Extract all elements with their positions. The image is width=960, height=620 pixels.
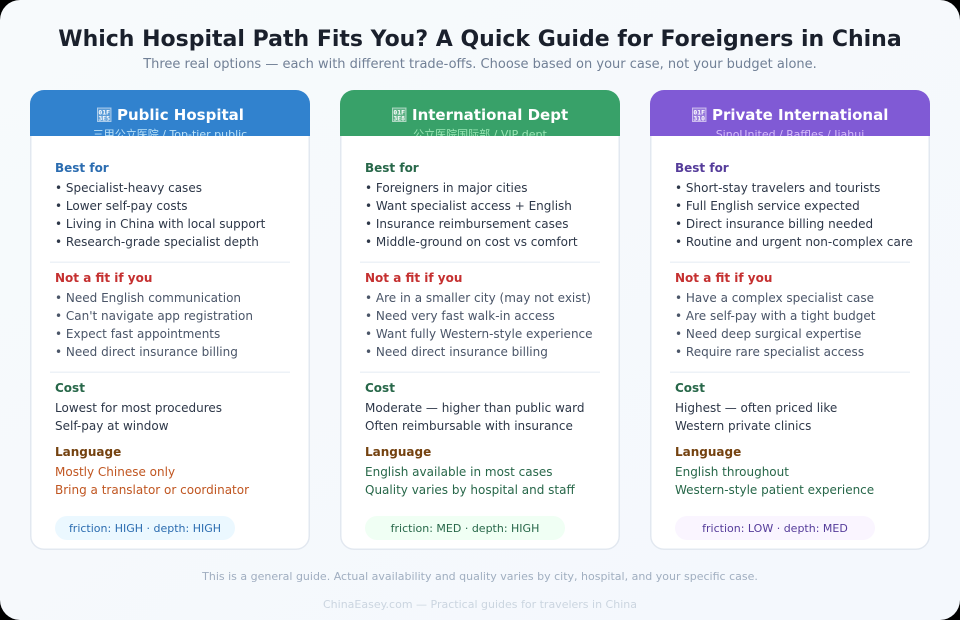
- section: not a fit: • Need very fast walk-in access: [365, 309, 555, 323]
- section: best for: • Insurance reimbursement cases: [365, 217, 568, 231]
- section: not a fit: • Need direct insurance billing: [365, 345, 548, 359]
- section: not a fit: Not a fit if you: [55, 271, 152, 285]
- section: not a fit: Not a fit if you: [675, 271, 772, 285]
- icon: missing-glyph box U+1F310: [692, 108, 706, 123]
- section: not a fit: • Have a complex specialist case: [675, 291, 874, 305]
- section: cost: Often reimbursable with insurance: [365, 419, 573, 433]
- section: not a fit: • Expect fast appointments: [55, 327, 220, 341]
- section: cost: Highest — often priced like: [675, 401, 837, 415]
- section: best for: • Research-grade specialist depth: [55, 235, 259, 249]
- card header: public hospital: [30, 90, 310, 141]
- section: not a fit: Not a fit if you: [365, 271, 462, 285]
- section: language: [55, 445, 249, 497]
- section: best for: • Middle-ground on cost vs comfort: [365, 235, 578, 249]
- section: language: Bring a translator or coordinator: [55, 483, 249, 497]
- card header: international dept: 公立医院国际部 / VIP dept: [413, 127, 548, 141]
- badge: friction and depth: friction: LOW · depth: MED: [702, 522, 848, 535]
- title: Which Hospital Path Fits You? A Quick Guide for Foreigners in China: [58, 27, 902, 52]
- section: best for: • Specialist-heavy cases: [55, 181, 202, 195]
- section: language: [365, 445, 575, 497]
- icon: missing-glyph box U+1F3E8: 3E8: [393, 115, 405, 123]
- section: not a fit: • Are in a smaller city (may not exist): [365, 291, 591, 305]
- card header: public hospital: 三甲公立医院 / Top-tier public: [93, 127, 247, 141]
- section: not a fit: • Are self-pay with a tight budget: [675, 309, 876, 323]
- section: cost: Cost: [675, 381, 705, 395]
- section: best for: • Short-stay travelers and tourists: [675, 181, 880, 195]
- section: language: English available in most cases: [365, 465, 553, 479]
- section: best for: • Routine and urgent non-complex care: [675, 235, 913, 249]
- section: not a fit: • Require rare specialist access: [675, 345, 864, 359]
- icon: missing-glyph box U+1F3E5: [98, 108, 111, 123]
- card body: private international: [650, 136, 930, 550]
- subtitle: Three real options — each with different trade-offs. Choose based on your case, not your budget alone.: [142, 57, 817, 72]
- section: not a fit: • Need deep surgical expertise: [675, 327, 861, 341]
- section: best for: • Want specialist access + English: [365, 199, 572, 213]
- section: language: Quality varies by hospital and staff: [365, 483, 575, 497]
- section: cost: [365, 381, 585, 433]
- badge: friction and depth: friction: MED · depth: HIGH: [391, 522, 539, 535]
- section: best for: • Direct insurance billing needed: [675, 217, 873, 231]
- icon: missing-glyph box U+1F310: 01F: [693, 108, 705, 116]
- section: language: Mostly Chinese only: [55, 465, 175, 479]
- section: language: Western-style patient experience: [675, 483, 874, 497]
- section: not a fit: • Can't navigate app registration: [55, 309, 253, 323]
- card body: public hospital: [30, 136, 310, 550]
- card header: private international: Private International: [712, 106, 888, 124]
- section: cost: Cost: [365, 381, 395, 395]
- section: cost: [675, 381, 837, 433]
- section: language: Language: [365, 445, 431, 459]
- section: not a fit: • Want fully Western-style experience: [365, 327, 593, 341]
- panel: international dept: [340, 90, 620, 550]
- section: cost: Cost: [55, 381, 85, 395]
- section: not a fit: [675, 271, 876, 359]
- section: cost: Moderate — higher than public ward: [365, 401, 585, 415]
- section: language: English throughout: [675, 465, 789, 479]
- card header: international dept: International Dept: [412, 106, 568, 124]
- card header: international dept: [340, 90, 620, 141]
- section: not a fit: • Need English communication: [55, 291, 241, 305]
- panel: public hospital: [30, 90, 310, 550]
- card body: international dept: [340, 136, 620, 550]
- icon: missing-glyph box U+1F3E8: [392, 108, 406, 123]
- icon: missing-glyph box U+1F310: 310: [693, 115, 705, 123]
- section: cost: Lowest for most procedures: [55, 401, 222, 415]
- section: best for: [675, 161, 913, 249]
- section: language: Language: [675, 445, 741, 459]
- section: best for: • Living in China with local support: [55, 217, 266, 231]
- section: language: Language: [55, 445, 121, 459]
- section: best for: Best for: [55, 161, 109, 175]
- section: not a fit: • Need direct insurance billing: [55, 345, 238, 359]
- icon: missing-glyph box U+1F3E5: 01F: [98, 108, 110, 116]
- section: best for: Best for: [675, 161, 729, 175]
- disclaimer: This is a general guide. Actual availability and quality varies by city, hospital, and your specific case.: [201, 570, 758, 583]
- panel: private international: [650, 90, 930, 550]
- section: cost: Western private clinics: [675, 419, 811, 433]
- card header: private international: SinoUnited / Raffles / Jiahui: [716, 128, 864, 141]
- section: not a fit: [55, 271, 253, 359]
- footer credit: ChinaEasey.com — Practical guides for travelers in China: [323, 598, 637, 611]
- section: best for: Best for: [365, 161, 419, 175]
- section: not a fit: [365, 271, 593, 359]
- badge: friction and depth: [675, 516, 875, 540]
- section: best for: • Lower self-pay costs: [55, 199, 188, 213]
- section: cost: Self-pay at window: [55, 419, 169, 433]
- badge: friction and depth: [55, 516, 235, 540]
- section: best for: • Full English service expected: [675, 199, 860, 213]
- icon: missing-glyph box U+1F3E5: 3E5: [98, 115, 110, 123]
- badge: friction and depth: friction: HIGH · depth: HIGH: [69, 522, 221, 535]
- section: best for: [365, 161, 578, 249]
- icon: missing-glyph box U+1F3E8: 01F: [393, 108, 405, 116]
- section: best for: [55, 161, 266, 249]
- section: best for: • Foreigners in major cities: [365, 181, 528, 195]
- card header: public hospital: Public Hospital: [117, 106, 244, 124]
- badge: friction and depth: [365, 516, 565, 540]
- section: cost: [55, 381, 222, 433]
- section: language: [675, 445, 874, 497]
- card header: private international: [650, 90, 930, 141]
